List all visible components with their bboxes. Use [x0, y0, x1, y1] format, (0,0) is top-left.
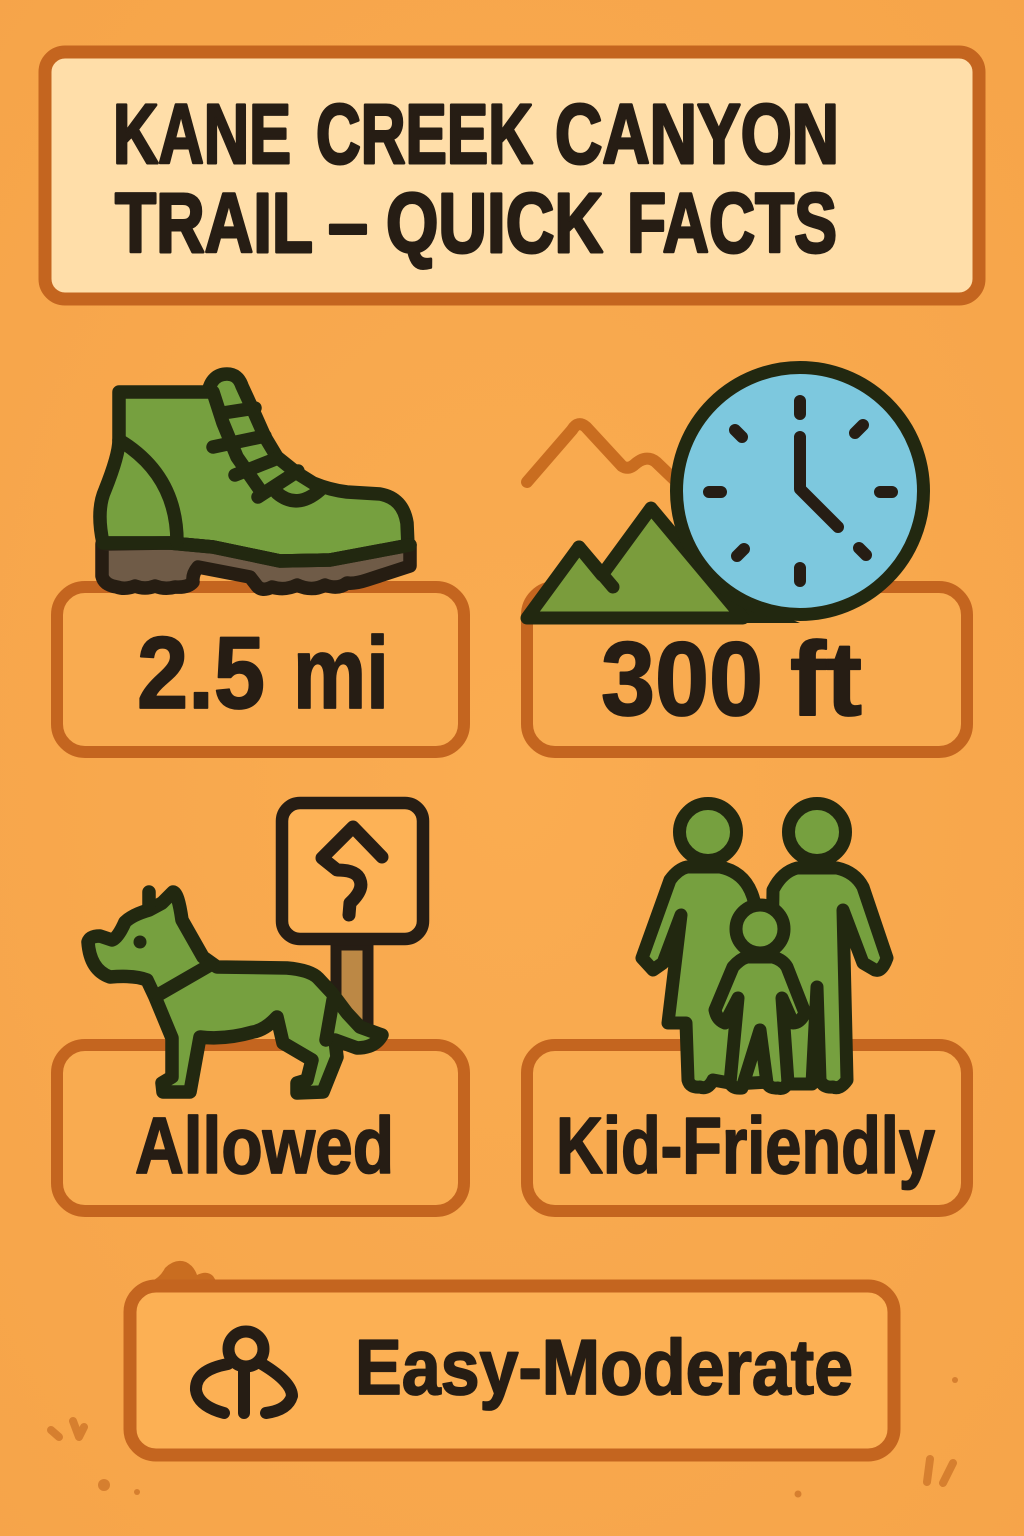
elevation value: 300 [601, 621, 763, 738]
kids value: Kid-Friendly [556, 1101, 935, 1190]
panel: difficulty [130, 1261, 894, 1455]
boot sole [102, 543, 410, 589]
child [715, 905, 805, 1088]
icon: dog [88, 892, 382, 1093]
title text: TRAIL [115, 176, 313, 270]
boot upper [100, 374, 408, 561]
icon: mountains and clock [527, 368, 924, 623]
adult right [770, 804, 887, 1088]
icon: hiking boot [100, 374, 410, 589]
title text: CANYON [555, 87, 839, 181]
panel: distance [57, 587, 464, 752]
distance value [137, 616, 389, 730]
icon: family [642, 804, 887, 1088]
title text [113, 87, 839, 270]
title text: KANE [113, 87, 291, 181]
elevation value [601, 621, 862, 738]
elevation value: ft [790, 621, 862, 738]
adult left [642, 804, 770, 1088]
title text: QUICK [386, 176, 603, 270]
icon: trail sign [282, 803, 423, 1030]
decorative mound [150, 1261, 218, 1284]
dogs value: Allowed [135, 1101, 394, 1190]
distance value: 2.5 [137, 616, 265, 730]
ground marks [51, 1377, 958, 1498]
title text: – [328, 176, 368, 270]
title panel [45, 52, 979, 299]
green mountains [527, 508, 800, 623]
laces [213, 392, 320, 501]
icon: difficulty symbol [196, 1332, 292, 1413]
panel: dogs [57, 1045, 464, 1211]
mountain outline [527, 424, 680, 485]
title text: FACTS [627, 176, 837, 270]
clock [676, 368, 924, 614]
panel: kids [527, 1045, 967, 1211]
title text: CREEK [316, 87, 533, 181]
heel counter [119, 440, 177, 542]
panel: elevation [527, 587, 967, 752]
distance value: mi [293, 616, 389, 730]
difficulty value: Easy-Moderate [355, 1323, 853, 1411]
